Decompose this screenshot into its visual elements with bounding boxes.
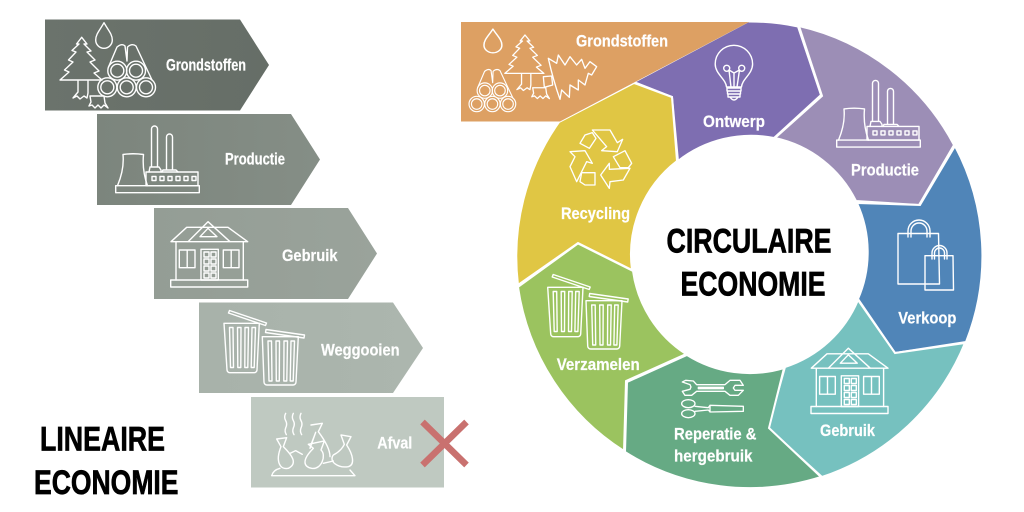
icon: factory [116, 126, 199, 193]
title: lineaire economie: ECONOMIE [34, 464, 178, 502]
icon: drop, trees and logs [469, 29, 597, 112]
text block: label [674, 425, 757, 466]
panel: lineaire economie [34, 20, 466, 502]
segment: Grondstoffen [461, 22, 749, 122]
icon: house [811, 348, 888, 414]
segment: Recycling: Recycling [561, 205, 630, 223]
icon: trash bins [224, 310, 304, 385]
icon: waste bags [272, 413, 355, 476]
segment: Recycling [516, 83, 677, 285]
icon: trash bins [548, 274, 628, 349]
segment: Verkoop [857, 146, 982, 353]
icon: red cross [422, 422, 466, 465]
segment: Ontwerp [634, 21, 821, 161]
segment: Verkoop: Verkoop [898, 309, 956, 327]
icon: light bulb [715, 45, 753, 100]
icon: tree, drop and logs [60, 23, 156, 108]
segment: Reperatie en hergebruik [625, 355, 821, 488]
panel: Afval: Afval [377, 434, 412, 452]
segment: Gebruik: Gebruik [820, 422, 876, 440]
title: circulaire economie: ECONOMIE [680, 266, 826, 304]
segment: Verzamelen: Verzamelen [557, 356, 640, 374]
segment: Gebruik [768, 300, 965, 477]
title: circulaire economie [666, 222, 832, 304]
icon: house [171, 222, 248, 287]
segment: Productie: Productie [851, 162, 919, 180]
arrow: Grondstoffen: Grondstoffen [166, 57, 246, 75]
panel: circulaire economie [461, 21, 982, 488]
icon: shopping bags [898, 220, 954, 290]
icon: wrench and scissors [682, 380, 743, 418]
title: lineaire economie [34, 420, 178, 502]
arrow: Weggooien: Weggooien [321, 342, 400, 360]
arrow: Productie [97, 114, 320, 205]
text block: label: Reperatie & [674, 425, 757, 443]
title: circulaire economie: CIRCULAIRE [666, 222, 832, 260]
arrow: Gebruik: Gebruik [282, 247, 338, 265]
segment: Grondstoffen: Grondstoffen [576, 33, 668, 51]
arrow: Productie: Productie [225, 150, 285, 168]
text block: label: hergebruik [674, 448, 753, 466]
arrow: Grondstoffen [45, 20, 269, 110]
arrow: Weggooien [199, 302, 423, 393]
icon: recycling arrows [570, 130, 632, 188]
segment: Productie [775, 26, 954, 205]
panel: Afval [251, 397, 444, 488]
title: lineaire economie: LINEAIRE [40, 420, 165, 458]
segment: Ontwerp: Ontwerp [703, 113, 765, 131]
arrow: Gebruik [154, 208, 377, 299]
segment: Verzamelen [518, 244, 686, 451]
icon: factory [837, 80, 920, 147]
